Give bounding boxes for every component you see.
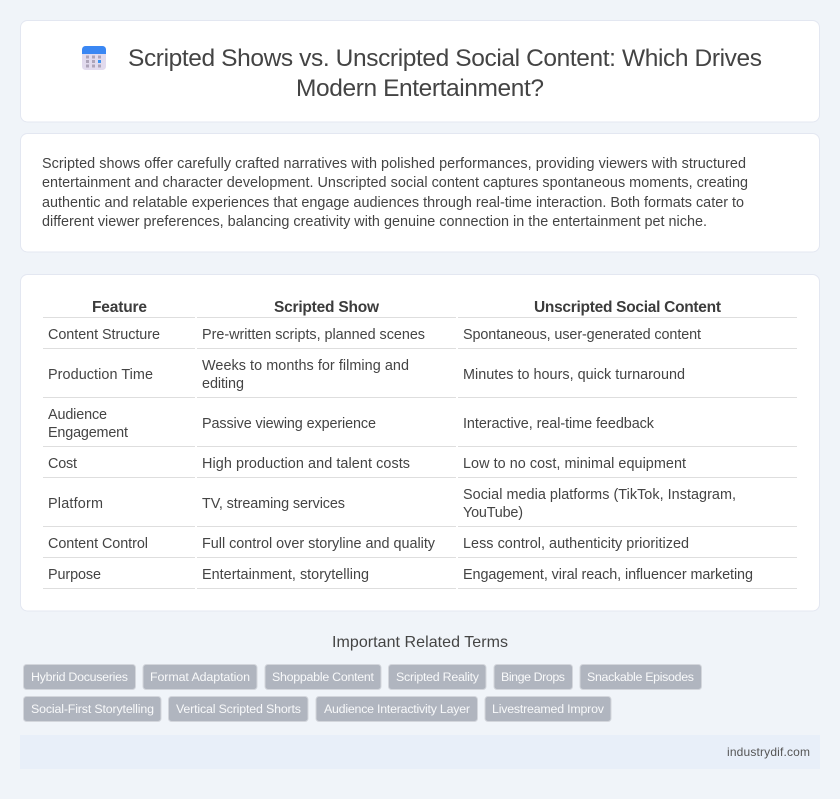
row: platform: Social media platforms (TikTok, Instagram, — [463, 487, 736, 503]
tag group: related terms — [24, 664, 702, 722]
icon: calendar — [82, 46, 106, 70]
row: audience engagement: Passive viewing experience — [202, 416, 376, 432]
row: purpose: Engagement, viral reach, influencer marketing — [463, 567, 753, 583]
tag: binge drops: Binge Drops — [501, 670, 565, 684]
text block: introduction paragraph: authentic and relatable experiences that engage audiences through real-time interaction. Both formats cater to — [42, 195, 744, 211]
row: content control: Content Control — [48, 536, 148, 552]
row: platform: Platform — [48, 496, 103, 512]
tag: livestreamed improv: Livestreamed Improv — [492, 702, 605, 716]
table header row — [43, 299, 797, 318]
table header row: Feature — [92, 299, 147, 316]
tag: scripted reality — [388, 664, 486, 690]
row: production time: Minutes to hours, quick turnaround — [463, 367, 685, 383]
text block: introduction paragraph: Scripted shows offer carefully crafted narratives with polished performances, providing viewers with structured — [42, 156, 746, 172]
text block: introduction paragraph: different viewer preferences, balancing creativity with genuine connection in the entertainment pet niche. — [42, 214, 707, 230]
footer source: industrydif.com — [727, 745, 810, 759]
table header row: Unscripted Social Content — [534, 299, 721, 316]
tag: format adaptation: Format Adaptation — [150, 670, 250, 684]
tag: livestreamed improv — [485, 696, 611, 722]
row: cost: High production and talent costs — [202, 456, 410, 472]
row: content structure: Spontaneous, user-generated content — [463, 327, 701, 343]
row: production time: editing — [202, 376, 244, 392]
tag: shoppable content — [265, 664, 381, 690]
tag: social-first storytelling: Social-First Storytelling — [31, 702, 154, 716]
row: production time — [43, 358, 797, 398]
row: audience engagement — [43, 407, 797, 446]
tag: snackable episodes: Snackable Episodes — [587, 670, 694, 684]
row: purpose: Purpose — [48, 567, 101, 583]
text block: introduction paragraph: entertainment and character development. Unscripted social content captures spontaneous moments, creating — [42, 175, 748, 191]
row: content structure — [43, 327, 797, 348]
row: content structure: Pre-written scripts, planned scenes — [202, 327, 425, 343]
tag: format adaptation — [143, 664, 257, 690]
row: content control: Full control over storyline and quality — [202, 536, 436, 552]
tag: social-first storytelling — [24, 696, 161, 722]
row: purpose — [43, 567, 797, 588]
tag: snackable episodes — [580, 664, 702, 690]
row: content control: Less control, authenticity prioritized — [463, 536, 689, 552]
heading: important related terms: Important Related Terms — [332, 634, 508, 651]
tag: hybrid docuseries — [24, 664, 136, 690]
tag: scripted reality: Scripted Reality — [396, 670, 480, 684]
row: audience engagement: Audience — [48, 407, 107, 423]
row: cost — [43, 456, 797, 478]
panel: introduction — [20, 134, 820, 252]
row: production time: Production Time — [48, 367, 153, 383]
row: audience engagement: Interactive, real-time feedback — [463, 416, 655, 432]
text block: introduction paragraph — [42, 156, 748, 230]
tag: audience interactivity layer — [316, 696, 478, 722]
row: platform: TV, streaming services — [202, 496, 345, 512]
tag: hybrid docuseries: Hybrid Docuseries — [31, 670, 128, 684]
row: cost: Low to no cost, minimal equipment — [463, 456, 686, 472]
table header row: Scripted Show — [274, 299, 380, 316]
row: platform: YouTube) — [463, 505, 523, 521]
row: platform — [43, 487, 797, 526]
row: content structure: Content Structure — [48, 327, 160, 343]
tag: binge drops — [494, 664, 572, 690]
footer bar — [20, 735, 820, 769]
panel: title card — [20, 20, 820, 122]
row: content control — [43, 536, 797, 558]
title — [128, 45, 762, 102]
tag: shoppable content: Shoppable Content — [272, 670, 375, 684]
row: production time: Weeks to months for filming and — [202, 358, 409, 374]
row: cost: Cost — [48, 456, 77, 472]
tag: vertical scripted shorts: Vertical Scripted Shorts — [176, 702, 301, 716]
tag: audience interactivity layer: Audience Interactivity Layer — [324, 702, 470, 716]
title: Scripted Shows vs. Unscripted Social Content: Which Drives — [128, 45, 762, 72]
panel: comparison table — [20, 274, 820, 611]
row: purpose: Entertainment, storytelling — [202, 567, 369, 583]
row: audience engagement: Engagement — [48, 425, 128, 441]
title: Modern Entertainment? — [296, 75, 544, 102]
tag: vertical scripted shorts — [168, 696, 308, 722]
